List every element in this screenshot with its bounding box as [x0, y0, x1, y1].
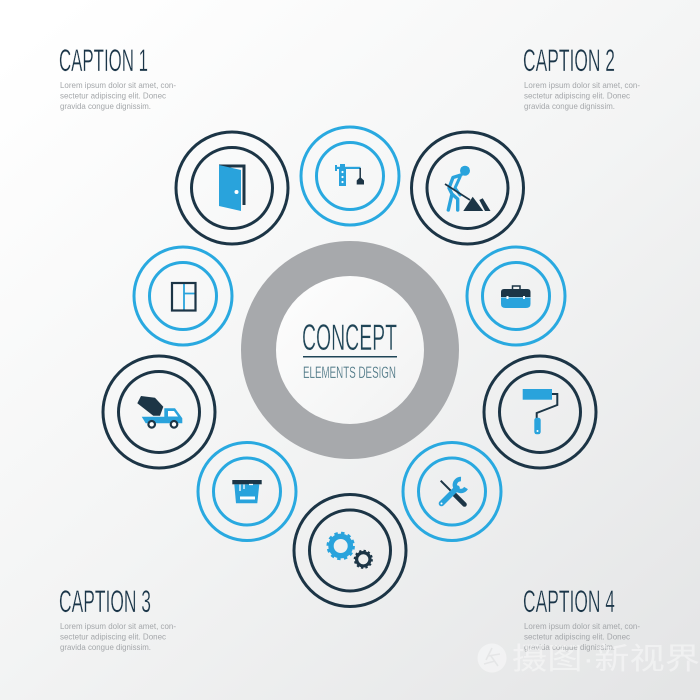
- central donut: [258, 258, 442, 442]
- central concept label: [302, 317, 397, 382]
- caption 2 block: gravida congue dignissim.: [524, 101, 615, 111]
- ring and icon: crane: [301, 127, 399, 225]
- caption 2 block: sectetur adipiscing elit. Donec: [524, 90, 631, 100]
- caption 2 block: Lorem ipsum dolor sit amet, con-: [524, 80, 640, 90]
- caption 4 block: Lorem ipsum dolor sit amet, con-: [524, 621, 640, 631]
- ring and icon: paint roller: [484, 356, 596, 468]
- ring and icon: window: [134, 247, 232, 345]
- ring and icon: door: [176, 132, 288, 244]
- caption 3 block: CAPTION 3: [59, 583, 151, 619]
- ring and icon: gears: [294, 494, 406, 606]
- caption 4 block: CAPTION 4: [523, 583, 615, 619]
- caption 3 block: Lorem ipsum dolor sit amet, con-: [60, 621, 176, 631]
- caption 1 block: sectetur adipiscing elit. Donec: [60, 90, 167, 100]
- ring and icon: paint bucket: [198, 442, 296, 540]
- caption 3 block: gravida congue dignissim.: [60, 642, 151, 652]
- caption 4 block: gravida congue dignissim.: [524, 642, 615, 652]
- watermark: 摄图·新视界: [512, 643, 700, 676]
- caption 4 block: sectetur adipiscing elit. Donec: [524, 632, 631, 642]
- caption 4 block: [523, 583, 640, 652]
- caption 1 block: [59, 42, 176, 111]
- central concept label: CONCEPT: [302, 317, 397, 358]
- caption 1 block: CAPTION 1: [59, 42, 148, 78]
- ring and icon: road worker: [412, 132, 524, 244]
- caption 3 block: sectetur adipiscing elit. Donec: [60, 632, 167, 642]
- ring and icon: toolbox: [467, 247, 565, 345]
- ring and icon: cement truck: [103, 356, 215, 468]
- caption 2 block: [523, 42, 640, 111]
- ring and icon: wrench and screwdriver: [403, 442, 501, 540]
- caption 2 block: CAPTION 2: [523, 42, 615, 78]
- caption 1 block: gravida congue dignissim.: [60, 101, 151, 111]
- caption 3 block: [59, 583, 176, 652]
- caption 1 block: Lorem ipsum dolor sit amet, con-: [60, 80, 176, 90]
- central concept label: ELEMENTS DESIGN: [303, 363, 396, 382]
